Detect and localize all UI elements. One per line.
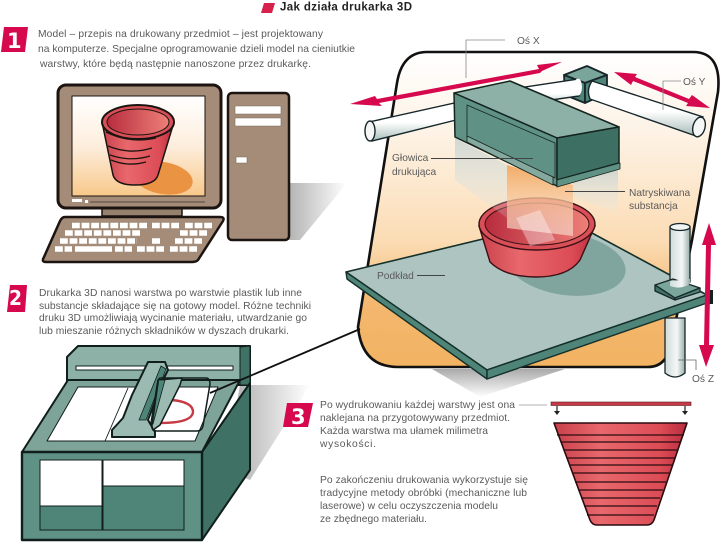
printer top bbox=[22, 380, 240, 452]
sprayed substance bbox=[455, 138, 618, 246]
step 3 text: finishing: Po zakończeniu drukowania wykorzystuje się bbox=[320, 475, 528, 486]
printer shadow bbox=[225, 385, 310, 480]
step 3 text: layers: Każda warstwa ma ułamek milimetra bbox=[320, 426, 488, 437]
plate clamp bbox=[707, 290, 713, 304]
step 3 text: finishing: laserowe) w celu oczyszczenia modelu bbox=[320, 501, 498, 512]
keyboard bbox=[43, 217, 224, 262]
label: Głowica drukująca bbox=[392, 153, 533, 178]
layer sheet outline bbox=[152, 378, 210, 431]
panel: printer frame background bbox=[358, 52, 718, 367]
arrow: Y axis bbox=[614, 72, 710, 108]
step 1 badge: 1 bbox=[7, 29, 22, 53]
z axis block bbox=[655, 279, 700, 300]
monitor bbox=[58, 85, 221, 208]
label: Głowica drukująca: drukująca bbox=[392, 167, 437, 178]
label: Natryskiwana substancja: Natryskiwana bbox=[629, 188, 690, 199]
plate bbox=[346, 219, 707, 379]
label: Natryskiwana substancja bbox=[565, 188, 690, 212]
label: Oś Y bbox=[663, 77, 706, 110]
step 2 badge: 2 bbox=[9, 286, 22, 310]
label: Natryskiwana substancja: substancja bbox=[629, 201, 678, 212]
printer tray bbox=[47, 387, 218, 441]
front panels bbox=[40, 460, 184, 530]
icon: computer bbox=[43, 85, 289, 262]
step 2 badge bbox=[7, 285, 27, 312]
left rod bbox=[365, 100, 468, 141]
new layer with arrows bbox=[551, 402, 691, 415]
step 3 text: layers: Po wydrukowaniu każdej warstwy jest ona bbox=[320, 400, 515, 411]
step 1 text: Model – przepis na drukowany przedmiot – jest projektowany bbox=[38, 29, 324, 40]
label: Podkład bbox=[377, 271, 445, 282]
arrow: X axis bbox=[350, 62, 562, 106]
plate shadow bbox=[432, 369, 565, 397]
step 3 text: layers: naklejana na przygotowywany przedmiot. bbox=[320, 413, 510, 424]
connector line bbox=[210, 329, 360, 393]
step 2 text: Drukarka 3D nanosi warstwa po warstwie plastik lub inne bbox=[39, 288, 302, 299]
step 3 text: layers: wysokości. bbox=[319, 439, 376, 450]
icon: desktop 3D printer bbox=[22, 346, 250, 540]
screen pot shadow bbox=[131, 157, 195, 199]
label: Oś Z: Oś Z bbox=[692, 374, 714, 385]
cube bbox=[564, 66, 607, 103]
title: Jak działa drukarka 3D bbox=[280, 2, 412, 14]
rods and carriage bbox=[365, 66, 707, 141]
printed arc bbox=[160, 400, 193, 423]
step 3 badge: 3 bbox=[291, 405, 306, 429]
step 2 text: substancje składające się na gotowy model. Różne techniki bbox=[39, 301, 311, 312]
step 3 text: finishing: tradycyjne metody obróbki (mechaniczne lub bbox=[320, 488, 527, 499]
step 2 text: lub mieszanie różnych składników w dyszach drukarki. bbox=[39, 326, 289, 337]
step 3 text: finishing: ze zbędnego materiału. bbox=[320, 514, 427, 525]
label: Oś X: Oś X bbox=[517, 36, 540, 47]
label: Głowica drukująca: Głowica bbox=[392, 153, 429, 164]
z axis rod bbox=[655, 224, 700, 377]
arrow: Z axis bbox=[699, 223, 716, 367]
print head bbox=[454, 81, 620, 187]
label: Oś X bbox=[466, 36, 540, 78]
tray diagonal bbox=[105, 388, 128, 441]
layer leader bbox=[519, 404, 547, 406]
computer shadow bbox=[280, 183, 347, 240]
printer front bbox=[22, 452, 202, 540]
printed pot bbox=[479, 198, 595, 277]
printer back panel bbox=[67, 346, 250, 385]
step 2 text: druku 3D umożliwiają wycinanie materiału, utwardzanie go bbox=[39, 313, 307, 324]
screen pot bbox=[102, 105, 174, 185]
right rod bbox=[588, 81, 707, 138]
label: Oś Y: Oś Y bbox=[683, 77, 706, 88]
carriage bbox=[112, 362, 182, 437]
pot shadow bbox=[502, 225, 630, 303]
label: Podkład: Podkład bbox=[377, 271, 414, 282]
step 1 text: na komputerze. Specjalne oprogramowanie dzieli model na cieniutkie bbox=[38, 44, 355, 55]
label: Oś Z bbox=[678, 360, 714, 385]
monitor stand bbox=[102, 205, 182, 216]
back rod bbox=[505, 78, 582, 106]
printer right side bbox=[202, 383, 250, 540]
step 1 text: warstwy, które będą następnie nanoszone przez drukarkę. bbox=[39, 59, 311, 70]
step 3 badge bbox=[283, 403, 313, 429]
tower bbox=[228, 93, 289, 240]
layered pot bbox=[554, 423, 687, 525]
step 1 badge bbox=[1, 27, 28, 53]
